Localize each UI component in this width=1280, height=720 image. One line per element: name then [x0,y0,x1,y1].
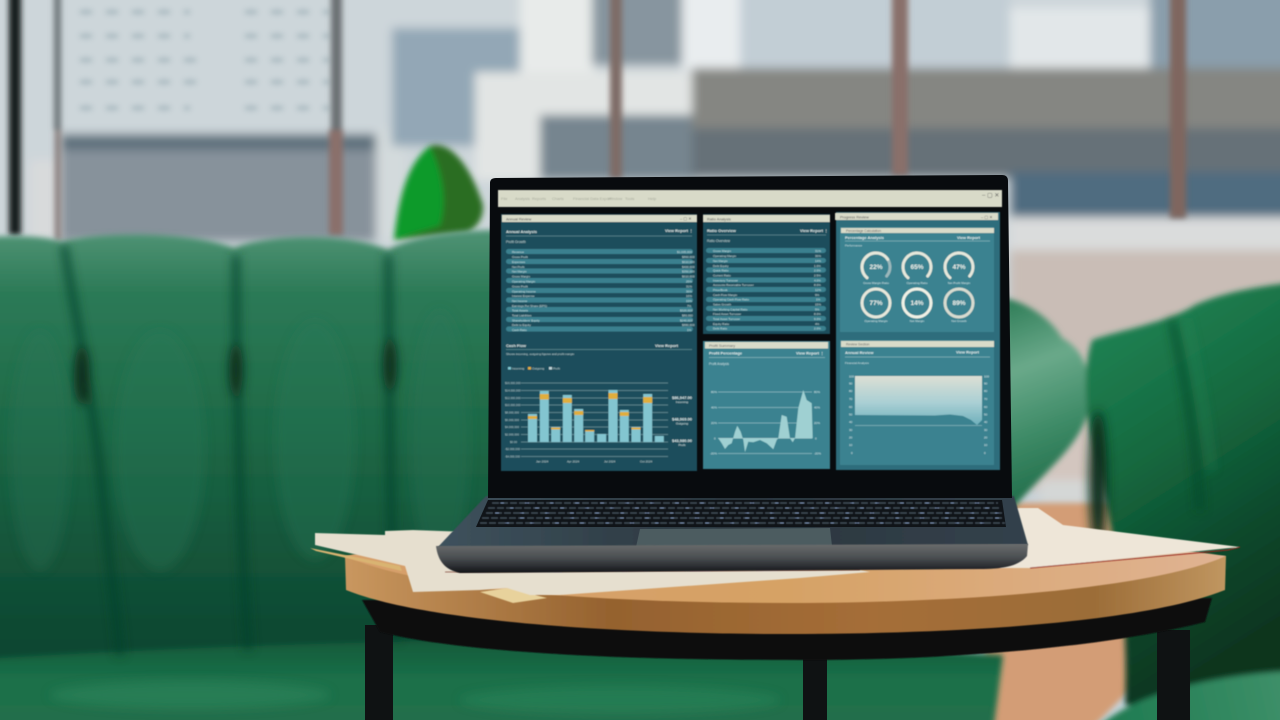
app toolbar: Charts [552,196,564,201]
app toolbar [498,190,1002,207]
chart legend: Outgoing [532,366,545,370]
table: annual metrics: $880,000 [682,323,695,327]
area chart: annual: 20 [849,436,853,440]
sofa right arm [1005,298,1090,510]
table: ratios: 12% [815,288,821,292]
table: ratios: Cash Flow Margin [713,293,738,297]
panel: profit percentage: Profit Percentage [709,350,743,356]
app toolbar: File [501,196,508,201]
sofa back cushions [0,230,500,670]
table side band [345,556,1226,634]
background: green plant [394,145,483,240]
keyboard [476,500,1006,527]
chart legend: Incoming [512,366,525,370]
area chart: annual: 50 [849,412,853,416]
sub-panel: annual review chart: Annual Review [845,350,874,355]
area chart: annual: 60 [984,405,988,409]
gauge 77% [862,289,890,323]
area chart: annual: 10 [984,443,988,447]
table: ratios: 2.5% [814,274,821,278]
gauge 89%: Net Growth [951,319,967,323]
table: ratios: 9% [815,293,820,297]
table: annual metrics: Gross Profit [512,255,528,259]
table: ratios: Quick Ratio [713,268,729,272]
chart legend [508,366,560,370]
touchpad [636,528,832,547]
table: annual metrics: 16% [686,294,692,298]
sofa seam and tuft shadows [10,245,1212,714]
table: annual metrics: Debt to Equity [512,323,531,327]
table: annual metrics: Total Assets [512,308,529,312]
panel: progress review: Progress Review [840,216,869,220]
table: annual metrics: Net Margin [512,270,527,274]
area chart: annual: 70 [984,397,988,401]
papers under the laptop [310,508,1240,603]
gauge 65%: 65% [910,264,924,271]
bar chart: cash flow: $16,000,000 [505,381,521,385]
table: ratios: Fixed Asset Turnover [713,312,741,316]
gauge 77%: Operating Margin [864,319,888,323]
panel: ratio analysis: View Report ⋮ [800,228,828,234]
gauge 77%: 77% [869,300,883,307]
area chart: profit [710,390,821,456]
table: ratios: Operating Margin [713,254,737,258]
table: ratios: Inventory Turnover [713,278,738,282]
area chart: annual: 80 [984,389,988,393]
gauge 47% [939,247,979,287]
app toolbar: Help [648,196,657,201]
table: ratios: Gross Margin [713,249,731,253]
app toolbar: Window [608,196,622,201]
gauge 14%: 14% [910,300,924,307]
table: ratios: Price/Book [713,288,728,292]
table: annual metrics [506,249,695,332]
table: annual metrics: $610,000 [682,274,695,278]
table: annual metrics: Operating Margin [512,280,536,284]
bar chart: cash flow: Jul 2024 [604,460,616,464]
bar chart: cash flow: $14,000,000 [505,388,521,392]
sub-panel: annual review chart [840,340,994,465]
bar chart: cash flow: -$4,000,000 [505,454,520,458]
sub-panel: percentage analysis: Percentage Analysis [845,235,885,240]
area chart: annual: 30 [984,428,988,432]
panel: profit percentage [703,341,830,469]
bar chart: cash flow: $10,000,000 [505,403,521,407]
table: ratios: Net Margin [713,259,728,263]
sub-panel: percentage analysis [840,227,994,332]
area chart: annual: 0 [984,451,986,455]
gauge 22%: Gross Margin Ratio [863,281,889,285]
cash flow totals: Profit [678,443,686,447]
area chart: profit: 40% [711,406,717,410]
area chart: profit: 0 [714,436,716,440]
table: ratios: 2.0% [814,268,821,272]
panel: annual review: Annual Review [506,218,532,222]
panel: ratio analysis [703,214,830,334]
cash flow totals: Incoming [676,400,688,404]
chart legend: Profit [553,366,560,370]
table: annual metrics: Cash Ratio [512,328,527,332]
area chart: annual: 30 [849,428,853,432]
area chart: annual: 10 [849,443,853,447]
table: ratios: 15% [815,302,821,306]
bars [528,390,664,442]
wooden floor [985,503,1135,720]
table: ratios: Operating Cash Flow Ratio [713,298,749,302]
paper edges on left [310,548,402,571]
table legs [365,625,1190,720]
table: annual metrics: 7% [687,304,692,308]
bar chart: cash flow: $2,000,000 [505,432,519,436]
gauge 65%: Operating Ratio [906,281,928,285]
table: ratios: Net Working Capital Ratio [713,308,748,312]
cash flow totals: $43,980.00 [672,438,693,443]
area chart: profit: 40% [814,406,820,410]
cash flow totals: Outgoing [676,422,688,426]
table: annual metrics: Net Profit [512,265,525,269]
gauge 47%: Net Profit Margin [948,281,971,285]
gauge 14% [903,289,931,323]
paper corner [480,588,547,603]
area chart: annual: 40 [849,420,853,424]
table: annual metrics: 1% [687,328,692,332]
panel: annual review: View Report [655,343,679,348]
table: ratios: 14% [815,259,821,263]
table: annual metrics: 19% [686,299,692,303]
table: annual metrics: Gross Profit [512,284,528,288]
heading: cash flow: Cash Flow [506,343,527,348]
area chart: profit: 80% [711,390,717,394]
area chart: annual: 80 [849,389,853,393]
area chart: annual: 90 [984,382,988,386]
panel: annual review: – ▢ ✕ [680,216,692,221]
table: ratios [706,248,826,331]
table: ratios: Current Ratio [713,274,731,278]
app toolbar: – ▢ ✕ [982,193,999,199]
table: annual metrics: Gross Margin [512,274,530,278]
area chart: annual: 0 [851,451,853,455]
area chart: annual: 90 [849,382,853,386]
table: ratios: Debt Ratio [713,326,728,330]
table: ratios: 8.0% [814,312,821,316]
table: annual metrics: Expenses [512,260,526,264]
area chart: profit: 80% [814,390,820,394]
app toolbar: Tools [625,196,634,201]
table: annual metrics: $240,000 [680,318,693,322]
bar chart: cash flow: $6,000,000 [505,418,519,422]
table: annual metrics: $80,000 [682,314,693,318]
laptop [436,175,1028,573]
gauge 22%: 22% [869,264,883,271]
sub-panel: annual review chart: Financial Analysis [845,361,869,365]
panel: profit percentage: View Report ⋮ [796,350,824,356]
background: window grid of far building [80,12,330,108]
panel: annual review [501,214,697,471]
table: ratios: Total Asset Turnover [713,317,740,321]
chair seat [1095,670,1280,720]
bar chart: cash flow [505,381,668,464]
cash flow totals: $86,947.00 [672,395,693,400]
area chart: profit: 20% [814,421,820,425]
table: ratios: 5% [815,308,820,312]
area chart: profit: 20% [711,421,717,425]
app toolbar: Financial Data Export [573,196,612,201]
table: annual metrics: Operating Income [512,290,536,294]
table: annual metrics: $610,000 [682,260,695,264]
table: ratios: 1.0% [814,264,821,268]
table: ratios: 36% [815,254,821,258]
panel: annual review: Profit Growth [506,240,526,244]
table: ratios: 4% [815,322,820,326]
bar chart: cash flow: $12,000,000 [505,396,521,400]
table: annual metrics: 25% [686,280,692,284]
panel: ratio analysis: Ratio Analysis [707,218,731,222]
area chart: annual: 50 [984,412,988,416]
heading: annual analysis: Annual Analysis [506,229,538,234]
table: annual metrics: $860,000 [682,255,695,259]
laptop base with keyboard [436,496,1028,573]
sub-panel: percentage analysis: Percentage Calculation [846,229,881,233]
table: annual metrics: Revenue [512,250,524,254]
panel: progress review [835,212,1000,470]
table: ratios: Sales Growth [713,302,731,306]
table: annual metrics: 31% [686,284,692,288]
table: ratios: 4.0% [814,278,821,282]
bar chart: cash flow: $4,000,000 [505,425,519,429]
gauge 22% [856,247,896,287]
table: annual metrics: 36% [686,290,692,294]
laptop screen bezel [488,175,1012,498]
area chart: annual: 20 [984,436,988,440]
table: ratios: Equity Ratio [713,322,730,326]
gauge 65% [897,247,937,287]
right chair [1086,280,1280,715]
area chart: annual [849,374,989,455]
cash flow totals: $48,969.00 [672,416,693,422]
gauges [856,247,979,323]
panel: ratio analysis: Ratio Overview [707,228,737,233]
table [345,532,1226,720]
sub-panel: percentage analysis: Performance [845,244,863,248]
area chart: profit: 0 [815,436,817,440]
table: ratios: 8.0% [814,283,821,287]
bar chart: cash flow: $0.00 [510,440,517,444]
laptop deck [437,496,1028,548]
front edge [436,544,1028,573]
panel: profit percentage: Profit Summary [709,344,735,348]
gauge 47%: 47% [952,264,966,271]
gauge 14%: Net Margin [910,319,925,323]
table: annual metrics: Total Liabilities [512,314,532,318]
table: ratios: 1% [816,298,821,302]
table: ratios: Debt Equity [713,264,729,268]
table: ratios: Accounts Receivable Turnover [713,283,754,287]
gauge 89% [945,289,973,323]
paper left sheet [315,530,870,595]
area chart: annual: 100 [849,374,854,378]
panel: annual review: View Report ⋮ [665,228,693,234]
sub-panel: annual review chart: Review Section [846,342,869,346]
table: ratios: 2.0% [814,326,821,330]
screen: dashboard [498,190,1002,471]
panel: progress review: – ▢ ✕ [981,214,993,220]
table: ratios: 31% [815,249,821,253]
app toolbar: Reports [532,196,546,201]
area chart: annual: 70 [849,397,853,401]
area chart: profit: -20% [814,452,821,456]
app toolbar: Analysis [515,196,530,201]
background: window frame poles [9,0,1186,240]
table: annual metrics: $320,000 [680,308,693,312]
bar chart: cash flow: -$2,000,000 [505,447,520,451]
gauge 89%: 89% [952,300,966,307]
table: annual metrics: $1,005,000 [677,250,692,254]
area chart: annual: 100 [984,374,989,378]
table top surface [345,532,1226,603]
area chart: profit: -20% [710,452,717,456]
panel: annual review: Shows incoming, outgoing figures and profit margin [506,352,575,356]
cash flow totals [672,395,693,447]
sofa seat [0,640,1003,720]
table: annual metrics: $400,000 [682,265,695,269]
table: annual metrics: Earnings Per Share (EPS) [512,304,547,308]
table: annual metrics: Net Income [512,299,528,303]
table: annual metrics: Interest Expense [512,294,535,298]
area chart: annual: 60 [849,405,853,409]
sofa [0,230,1280,720]
bar chart: cash flow: Oct 2024 [640,460,653,464]
table: annual metrics: Shareholders' Equity [512,318,540,322]
sub-panel: percentage analysis: View Report [957,235,981,240]
bar chart: cash flow: Jan 2024 [536,460,549,464]
bar chart: cash flow: Apr 2024 [567,460,580,464]
table rim [362,598,1212,660]
panel: profit percentage: Profit Analysis [709,362,729,366]
area chart: annual: 40 [984,420,988,424]
table: ratios: 9.0% [814,317,821,321]
paper right sheet [1000,508,1240,568]
table: annual metrics: $350,000 [682,270,695,274]
bar chart: cash flow: $8,000,000 [505,410,519,414]
panel: ratio analysis: Ratio Overview [707,239,731,243]
background: blurred city view through window [0,0,1280,504]
sub-panel: annual review chart: View Report [956,350,980,354]
